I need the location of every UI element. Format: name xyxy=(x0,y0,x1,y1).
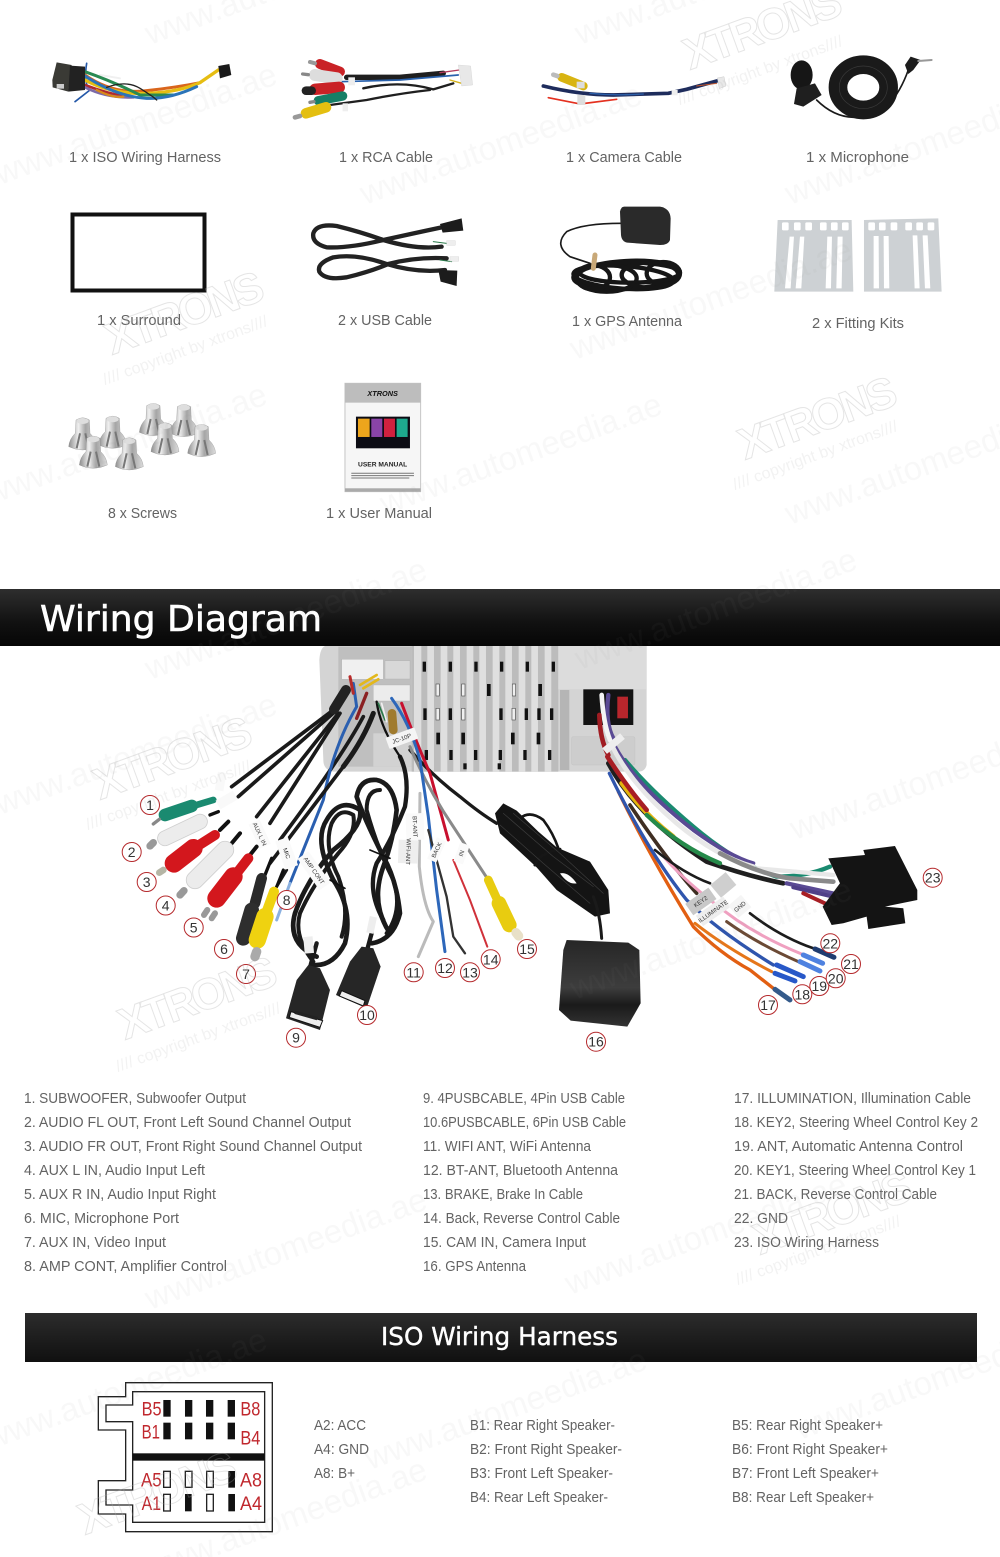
callout 9: 9 xyxy=(292,1030,300,1046)
watermarks: XTRONS xyxy=(87,707,258,809)
pin column B1-B4: B2: Front Right Speaker- xyxy=(470,1441,622,1458)
USB plug 10 xyxy=(336,916,381,1008)
callout 4: 4 xyxy=(162,898,170,914)
callout 10 xyxy=(358,1006,376,1024)
watermarks: www.automeedia.ae xyxy=(564,230,857,367)
callout 23 xyxy=(923,868,942,887)
pin column A: A2: ACC xyxy=(314,1417,366,1434)
icon: surround frame xyxy=(72,214,204,290)
icon: ISO wiring harness xyxy=(52,62,231,102)
wire tags: MIC xyxy=(281,847,291,860)
callout 18: 18 xyxy=(795,986,810,1002)
watermarks: www.automeedia.ae xyxy=(139,1180,432,1317)
callout 1: 1 xyxy=(146,797,154,813)
wiring diagram banner xyxy=(0,589,1000,646)
legend column 2: 13. BRAKE, Brake In Cable xyxy=(423,1186,583,1203)
callout 1 xyxy=(140,796,160,814)
icon: fitting kits xyxy=(774,218,942,292)
callout 10: 10 xyxy=(359,1007,375,1023)
legend column 2: 14. Back, Reverse Control Cable xyxy=(423,1210,620,1227)
icon: USB cables xyxy=(313,218,463,286)
callout 7 xyxy=(236,964,256,984)
diagram: ISO connector pinout: A4 xyxy=(240,1494,262,1515)
legend column 2: 9. 4PUSBCABLE, 4Pin USB Cable xyxy=(423,1090,625,1107)
RCA plug: red front right xyxy=(159,822,228,873)
pin column A: A4: GND xyxy=(314,1441,369,1458)
callout 11: 11 xyxy=(406,964,421,980)
mic plug xyxy=(243,858,272,938)
callout 19: 19 xyxy=(812,978,827,994)
label: surround: 1 x Surround xyxy=(97,312,181,329)
callout 8: 8 xyxy=(283,892,291,908)
label: ISO wiring harness: 1 x ISO Wiring Harness xyxy=(69,149,221,166)
GPS cable bundle xyxy=(495,803,610,938)
legend column 3: 23. ISO Wiring Harness xyxy=(734,1234,879,1251)
icon: red fuse xyxy=(617,697,628,718)
callout 5: 5 xyxy=(190,920,198,936)
icon: screws xyxy=(69,403,216,470)
callout 3: 3 xyxy=(143,874,151,890)
watermarks: //// copyright by xtrons//// xyxy=(734,1213,904,1289)
label: fitting kits: 2 x Fitting Kits xyxy=(812,315,904,332)
icon: user manual xyxy=(345,383,421,492)
pin column B5-B8: B8: Rear Left Speaker+ xyxy=(732,1489,874,1506)
watermarks: //// copyright by xtrons//// xyxy=(676,33,846,109)
pin column B5-B8: B6: Front Right Speaker+ xyxy=(732,1441,888,1458)
label: user manual: 1 x User Manual xyxy=(326,505,432,522)
pin column B5-B8 xyxy=(732,1417,888,1506)
diagram: ISO connector pinout xyxy=(98,1383,272,1532)
wire labels: KEY2 xyxy=(693,895,710,909)
callout 17 xyxy=(758,996,778,1014)
RCA plug: yellow video xyxy=(255,870,283,957)
label: JC-10P: JC-10P xyxy=(392,733,413,746)
wire tags: AMP CONT xyxy=(302,857,325,886)
callout 22: 22 xyxy=(823,935,838,951)
watermarks: www.automeedia.ae xyxy=(139,550,432,687)
legend column 3: 17. ILLUMINATION, Illumination Cable xyxy=(734,1090,971,1107)
legend column 1 xyxy=(24,1090,363,1275)
callout 6 xyxy=(214,940,234,958)
legend column 2: 16. GPS Antenna xyxy=(423,1258,527,1275)
callout 14: 14 xyxy=(483,951,499,967)
icon: user manual: USER MANUAL xyxy=(358,461,407,468)
legend: connection list xyxy=(24,1090,978,1275)
RCA plug: red AUX right xyxy=(204,847,257,918)
callout 19 xyxy=(810,976,829,996)
diagram: ISO connector pinout: B5 xyxy=(142,1399,162,1420)
panel: head unit rear xyxy=(319,646,647,772)
callout 14 xyxy=(481,950,500,969)
wire labels: ILLUMINATE xyxy=(698,900,730,925)
watermarks: //// copyright by xtrons//// xyxy=(731,418,901,494)
pin column B1-B4: B3: Front Left Speaker- xyxy=(470,1465,613,1482)
watermarks: www.automeedia.ae xyxy=(559,1165,852,1302)
wire tags: WIFI-ANT xyxy=(404,838,411,865)
callout 20: 20 xyxy=(828,970,844,986)
GPS puck xyxy=(559,940,641,1027)
pin column B5-B8: B5: Rear Right Speaker+ xyxy=(732,1417,883,1434)
legend column 3: 21. BACK, Reverse Control Cable xyxy=(734,1186,937,1203)
callout 2: 2 xyxy=(128,844,136,860)
wire tips xyxy=(775,949,834,1000)
callout 13 xyxy=(460,963,480,982)
watermarks: XTRONS xyxy=(112,947,283,1049)
label: USB cable: 2 x USB Cable xyxy=(338,312,432,329)
label: camera cable: 1 x Camera Cable xyxy=(566,149,682,166)
callout 11 xyxy=(404,963,423,982)
callout 13: 13 xyxy=(462,964,478,980)
watermarks: //// copyright by xtrons//// xyxy=(84,758,254,834)
panel: accessories xyxy=(52,57,942,522)
RCA plug: white AUX left xyxy=(180,833,240,895)
ISO wiring harness banner xyxy=(25,1313,977,1362)
watermarks: www.automeedia.ae xyxy=(374,385,667,522)
wire tags xyxy=(215,772,470,890)
watermarks: //// copyright by xtrons//// xyxy=(101,313,271,389)
label: RCA cable: 1 x RCA Cable xyxy=(339,149,433,166)
legend column 1: 5. AUX R IN, Audio Input Right xyxy=(24,1186,217,1203)
callout 2 xyxy=(122,842,141,862)
callout 22 xyxy=(821,934,840,953)
callout 4 xyxy=(156,896,175,915)
callout 3 xyxy=(137,872,156,892)
legend column 3: 18. KEY2, Steering Wheel Control Key 2 xyxy=(734,1114,978,1131)
callout 8 xyxy=(277,890,296,910)
watermarks: www.automeedia.ae xyxy=(359,1340,652,1477)
heading: wiring diagram: Wiring Diagram xyxy=(40,599,322,640)
heading: ISO wiring harness: ISO Wiring Harness xyxy=(381,1322,618,1351)
RCA plug: white front left xyxy=(150,812,218,846)
legend column 2: 10.6PUSBCABLE, 6Pin USB Cable xyxy=(423,1114,626,1131)
callout 12: 12 xyxy=(437,960,453,976)
watermarks: XTRONS xyxy=(99,262,270,364)
RCA plug: green xyxy=(153,800,213,824)
connector block xyxy=(342,659,410,701)
label: screws: 8 x Screws xyxy=(108,505,177,522)
diagram: ISO connector pinout: A1 xyxy=(142,1494,161,1515)
legend column 1: 8. AMP CONT, Amplifier Control xyxy=(24,1258,227,1275)
callout 9 xyxy=(286,1028,306,1047)
watermarks: XTRONS xyxy=(747,1162,918,1264)
pin column A: A8: B+ xyxy=(314,1465,355,1482)
icon: RCA cable xyxy=(295,62,473,117)
icon: user manual: XTRONS xyxy=(366,389,398,398)
wire tags: AUX L IN xyxy=(251,822,267,847)
callout 18 xyxy=(793,985,812,1004)
ISO pin list xyxy=(314,1417,888,1506)
wire tags: BACK xyxy=(431,842,444,859)
legend column 3 xyxy=(734,1090,978,1251)
watermarks: www.automeedia.ae xyxy=(564,870,857,1007)
socket xyxy=(583,689,633,725)
watermarks: www.automeedia.ae xyxy=(354,75,647,212)
wire labels xyxy=(685,872,751,927)
wire tags: IN xyxy=(459,850,466,858)
right signal wires xyxy=(392,698,488,957)
watermarks: //// copyright by xtrons//// xyxy=(114,1000,284,1076)
USB cable loops xyxy=(293,757,407,965)
panel: RCA and USB cable set xyxy=(150,675,519,1030)
callout 5 xyxy=(184,918,203,937)
ISO connector xyxy=(823,846,917,929)
legend column 1: 6. MIC, Microphone Port xyxy=(24,1210,180,1227)
legend column 2: 12. BT-ANT, Bluetooth Antenna xyxy=(423,1162,619,1179)
icon: GPS antenna xyxy=(561,207,681,292)
legend column 2: 15. CAM IN, Camera Input xyxy=(423,1234,587,1251)
RCA plug: yellow camera xyxy=(488,880,519,936)
callout 16 xyxy=(586,1032,606,1051)
callout 17: 17 xyxy=(760,997,776,1013)
callout 21 xyxy=(842,954,860,974)
callout 21: 21 xyxy=(843,956,859,972)
diagram: ISO connector pinout: B4 xyxy=(240,1429,261,1450)
callout 7: 7 xyxy=(242,966,250,982)
USB plug 9 xyxy=(286,936,330,1030)
callout 20 xyxy=(826,969,845,988)
pin column B1-B4: B1: Rear Right Speaker- xyxy=(470,1417,615,1434)
black signal wires xyxy=(232,675,400,920)
watermarks: XTRONS xyxy=(732,367,903,469)
legend column 3: 19. ANT, Automatic Antenna Control xyxy=(734,1138,963,1155)
callout 6: 6 xyxy=(220,941,228,957)
panel: ISO harness cable set xyxy=(599,695,917,1000)
legend column 1: 1. SUBWOOFER, Subwoofer Output xyxy=(24,1090,247,1107)
wires xyxy=(599,695,840,988)
legend column 3: 20. KEY1, Steering Wheel Control Key 1 xyxy=(734,1162,976,1179)
label: JC-10P xyxy=(385,727,418,749)
pin column B1-B4 xyxy=(470,1417,622,1506)
number callouts xyxy=(122,796,942,1051)
callout 15 xyxy=(518,940,536,958)
head to GPS cable xyxy=(410,750,497,823)
pin column B1-B4: B4: Rear Left Speaker- xyxy=(470,1489,608,1506)
label: microphone: 1 x Microphone xyxy=(806,149,909,166)
callout 12 xyxy=(436,958,454,978)
pin column A xyxy=(314,1417,369,1482)
panel: GPS antenna with cable bundle xyxy=(495,803,641,1027)
wire labels: GND xyxy=(734,900,748,914)
diagram: ISO connector pinout: B8 xyxy=(240,1399,260,1420)
pin column B5-B8: B7: Front Left Speaker+ xyxy=(732,1465,879,1482)
plate xyxy=(572,737,635,765)
legend column 2: 11. WIFI ANT, WiFi Antenna xyxy=(423,1138,592,1155)
watermarks: www.automeedia.ae xyxy=(569,540,862,677)
legend column 2 xyxy=(423,1090,626,1275)
callout 23: 23 xyxy=(925,870,941,886)
icon: microphone xyxy=(791,57,932,117)
watermarks: XTRONS xyxy=(72,1442,243,1544)
legend column 3: 22. GND xyxy=(734,1210,788,1227)
legend column 1: 3. AUDIO FR OUT, Front Right Sound Channel Output xyxy=(24,1138,363,1155)
diagram: ISO connector pinout: A8 xyxy=(240,1471,262,1492)
legend column 1: 2. AUDIO FL OUT, Front Left Sound Channel Output xyxy=(24,1114,352,1131)
legend column 1: 4. AUX L IN, Audio Input Left xyxy=(24,1162,206,1179)
callout 16: 16 xyxy=(588,1034,604,1050)
cable tie xyxy=(602,733,625,754)
wire tags: BT-ANT xyxy=(411,816,417,838)
diagram: ISO connector pinout: B1 xyxy=(142,1423,160,1444)
icon: camera cable xyxy=(543,75,726,105)
legend column 1: 7. AUX IN, Video Input xyxy=(24,1234,167,1251)
diagram: ISO connector pinout: A5 xyxy=(141,1471,162,1492)
callout 15: 15 xyxy=(519,941,535,957)
label: GPS antenna: 1 x GPS Antenna xyxy=(572,313,683,330)
